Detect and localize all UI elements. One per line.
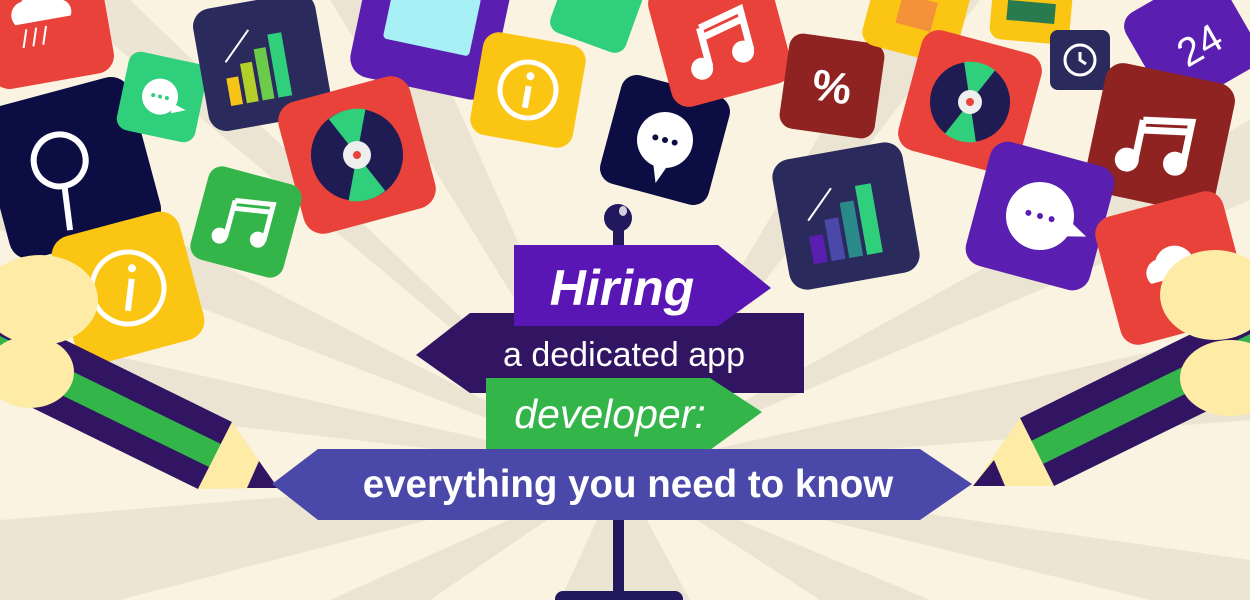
icon: percent bbox=[778, 32, 886, 140]
icon: 24: 24 bbox=[1170, 16, 1230, 76]
icon: 24 bbox=[1118, 0, 1250, 114]
icon: red music top bbox=[644, 0, 796, 111]
icon: yellow top right bbox=[859, 0, 977, 67]
icon: green top partial bbox=[547, 0, 649, 56]
icon: navy chat bbox=[596, 71, 734, 209]
icon: green chat small bbox=[115, 50, 209, 144]
sign: Hiring bbox=[514, 245, 771, 326]
icon: purple chat right bbox=[962, 138, 1118, 294]
left pencil and hand bbox=[0, 255, 278, 489]
sign: developer: developer: bbox=[514, 391, 706, 437]
signpost pole and base bbox=[555, 204, 683, 600]
icon: clock bbox=[1050, 30, 1110, 90]
icon: top small bbox=[989, 0, 1075, 45]
sign: a dedicated app bbox=[416, 313, 804, 393]
icon: yellow info left bbox=[47, 207, 209, 369]
icon: green music bbox=[187, 163, 305, 281]
icon: folder purple bbox=[347, 0, 517, 103]
sign: Hiring: Hiring bbox=[550, 260, 694, 316]
sign: developer bbox=[486, 378, 762, 450]
icon: vinyl left bbox=[274, 72, 440, 238]
right pencil and hand bbox=[973, 250, 1250, 486]
icon: yellow info top bbox=[468, 30, 588, 150]
icon: percent: % bbox=[809, 61, 855, 114]
sign: everything you need to know bbox=[272, 449, 972, 520]
icon: music right bbox=[1082, 60, 1238, 216]
icon: vinyl right bbox=[894, 26, 1046, 178]
sign: everything you need to know: everything you need to know bbox=[363, 463, 894, 506]
icon: chart right bbox=[770, 140, 922, 292]
icon: red cloud right bbox=[1091, 187, 1250, 349]
icon: chart top bbox=[190, 0, 334, 134]
icon: search bbox=[0, 72, 166, 264]
icon: red cloud top-left bbox=[0, 0, 117, 92]
sign: a dedicated app: a dedicated app bbox=[503, 336, 745, 374]
